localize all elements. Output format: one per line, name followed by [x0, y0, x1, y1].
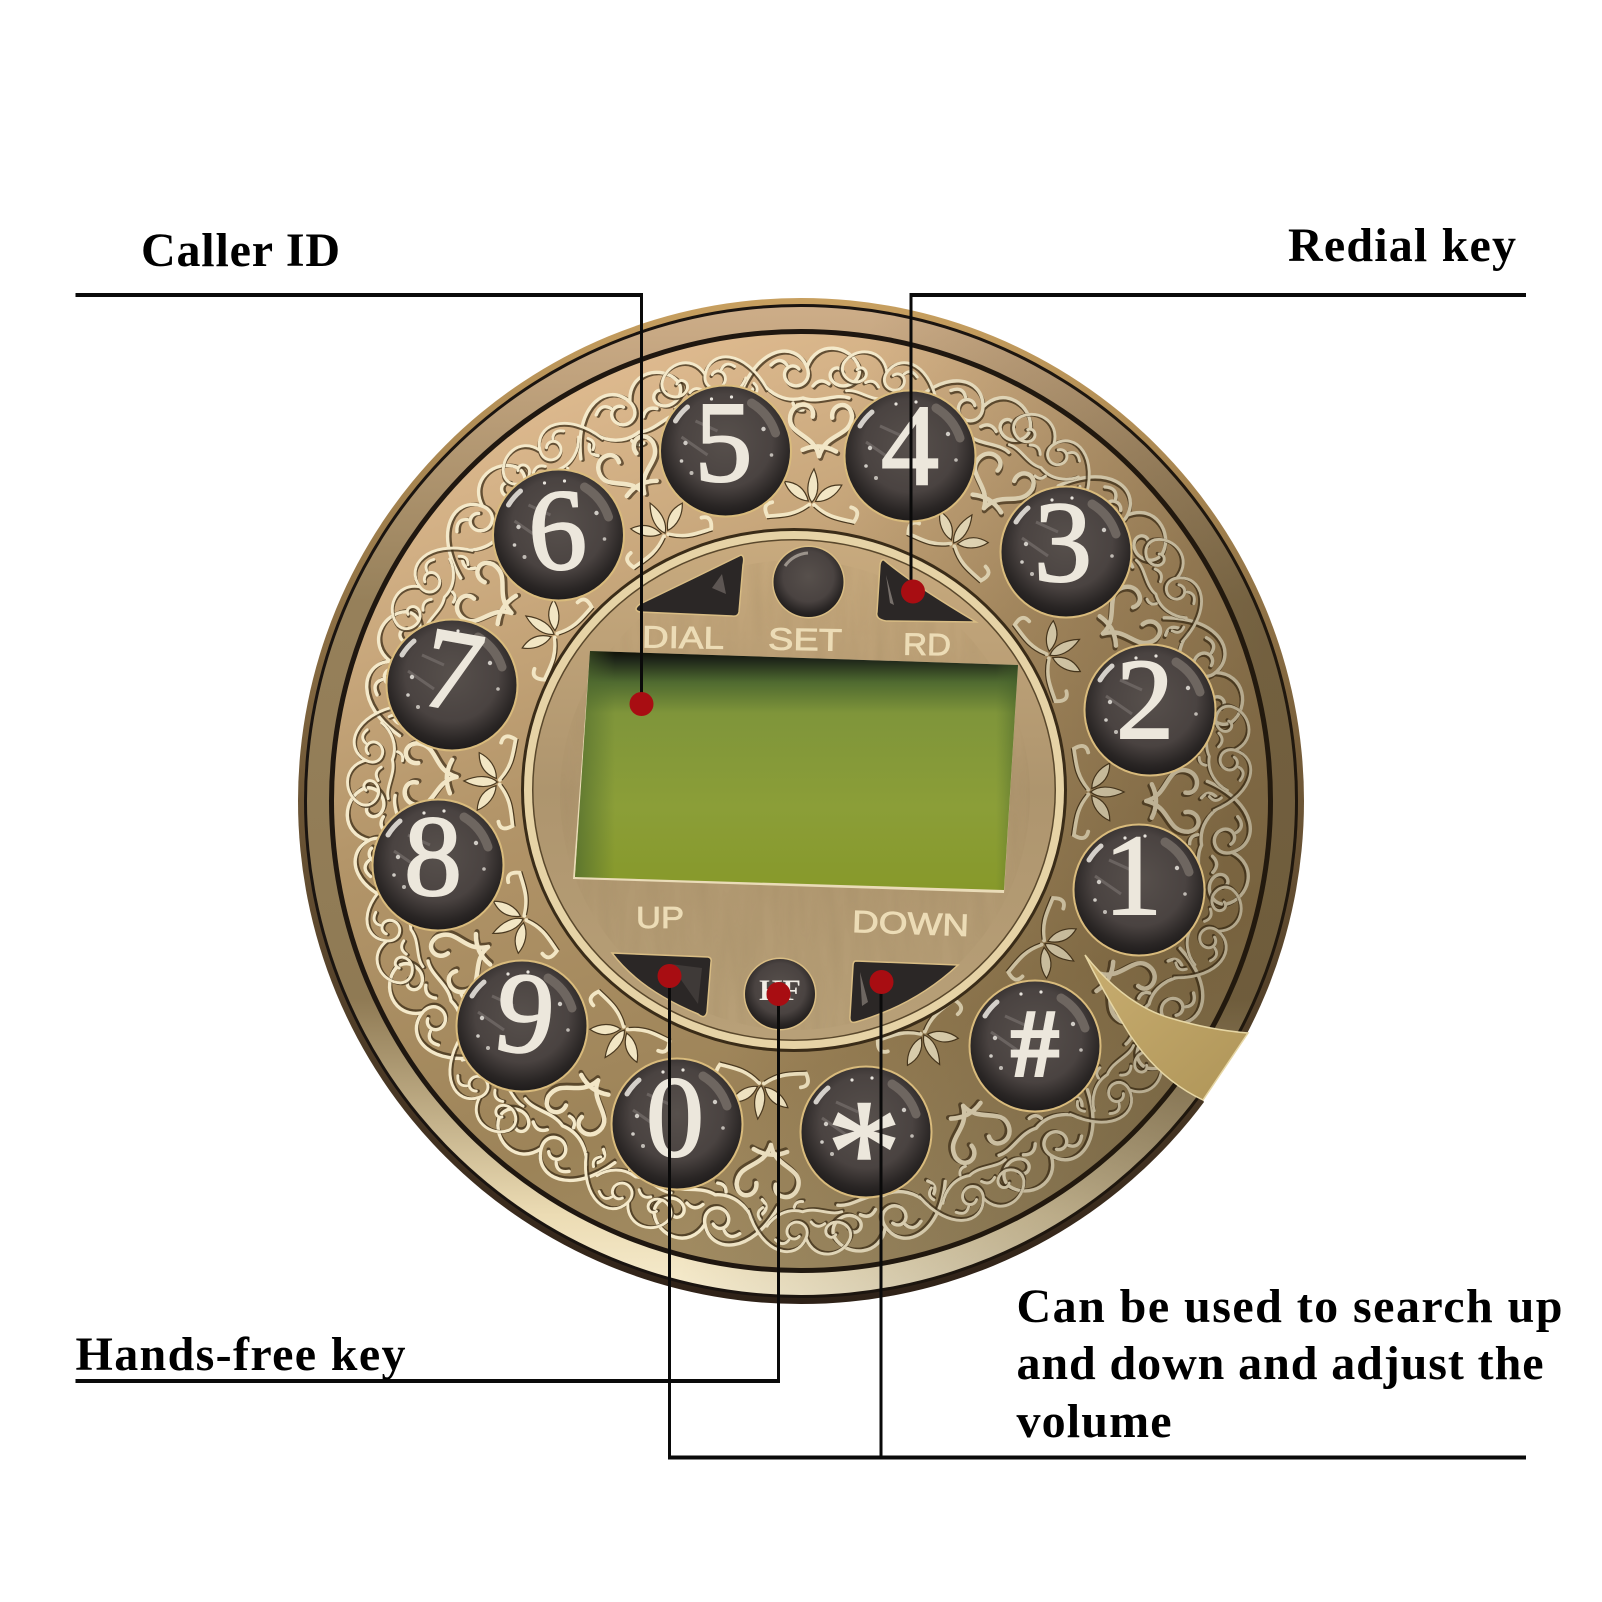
key 9: [456, 948, 588, 1092]
key 3: [1000, 479, 1132, 618]
engraved label: SET: SET: [768, 621, 842, 658]
marker: caller ID: [630, 692, 654, 716]
key 0: [610, 1054, 744, 1190]
rim band: [304, 304, 1298, 1298]
leader: Hands-free key: [76, 994, 780, 1383]
engraved label: RD: RD: [903, 627, 951, 662]
key 1: [1072, 812, 1206, 956]
marker: up: [658, 964, 682, 988]
LCD screen: [573, 651, 1018, 893]
outer rim: [298, 298, 1304, 1304]
phone dial: [298, 298, 1340, 1304]
key 4: [844, 382, 976, 522]
marker: down: [870, 970, 894, 994]
key 6: [492, 466, 625, 602]
key 8: 8: [404, 793, 462, 921]
leader: Redial key: [910, 293, 1526, 591]
label: search and volume: and down and adjust the: [1016, 1337, 1544, 1390]
key hash: [968, 980, 1102, 1112]
key 0: 0: [646, 1054, 704, 1182]
ornamented field: [334, 334, 1268, 1268]
key 8: [372, 793, 504, 932]
inner plate: [521, 528, 1067, 1052]
key star: *: [826, 1069, 902, 1235]
key 2: [1084, 636, 1216, 776]
key hash: #: [1010, 990, 1060, 1098]
key 5: 5: [694, 379, 752, 507]
label: search and volume: Can be used to search up: [1016, 1280, 1562, 1333]
leader: Caller ID: [76, 293, 642, 704]
function key: DIAL: [636, 555, 744, 616]
side shading: [304, 304, 1298, 1298]
key 1: 1: [1104, 812, 1162, 940]
marker: redial: [901, 580, 925, 604]
key 3: 3: [1034, 479, 1092, 607]
brushed texture: [560, 560, 1030, 1030]
marker: hands-free: [766, 982, 790, 1006]
scrollwork ring: [344, 347, 1258, 1257]
handset cradle flap: [1085, 955, 1248, 1100]
function key: HF: HF: [759, 974, 801, 1007]
key 9: 9: [490, 948, 561, 1081]
key 2: 2: [1116, 636, 1174, 764]
function key: HF: [744, 958, 816, 1030]
cut-away corner: [1203, 1000, 1340, 1180]
key star: [800, 1066, 932, 1235]
function key: RD: [877, 560, 976, 622]
function key: DOWN: [850, 961, 958, 1022]
label: Hands-free key: Hands-free key: [76, 1328, 406, 1381]
label: search and volume: [1016, 1280, 1562, 1448]
engraved label: DIAL: DIAL: [642, 619, 724, 656]
engraved label: DOWN: DOWN: [851, 904, 970, 943]
label: Redial key: Redial key: [1288, 219, 1516, 272]
key 6: 6: [525, 466, 590, 596]
label: Caller ID: Caller ID: [141, 224, 340, 277]
key 7: 7: [413, 603, 492, 739]
engraved label: UP: UP: [636, 900, 684, 935]
label: search and volume: volume: [1016, 1395, 1172, 1448]
key 5: [659, 379, 792, 518]
leader: search and volume: [668, 976, 1526, 1459]
function key: SET: [772, 546, 845, 618]
key 7: [386, 603, 518, 752]
function key: UP: [612, 953, 711, 1017]
key 4: 4: [881, 382, 939, 510]
